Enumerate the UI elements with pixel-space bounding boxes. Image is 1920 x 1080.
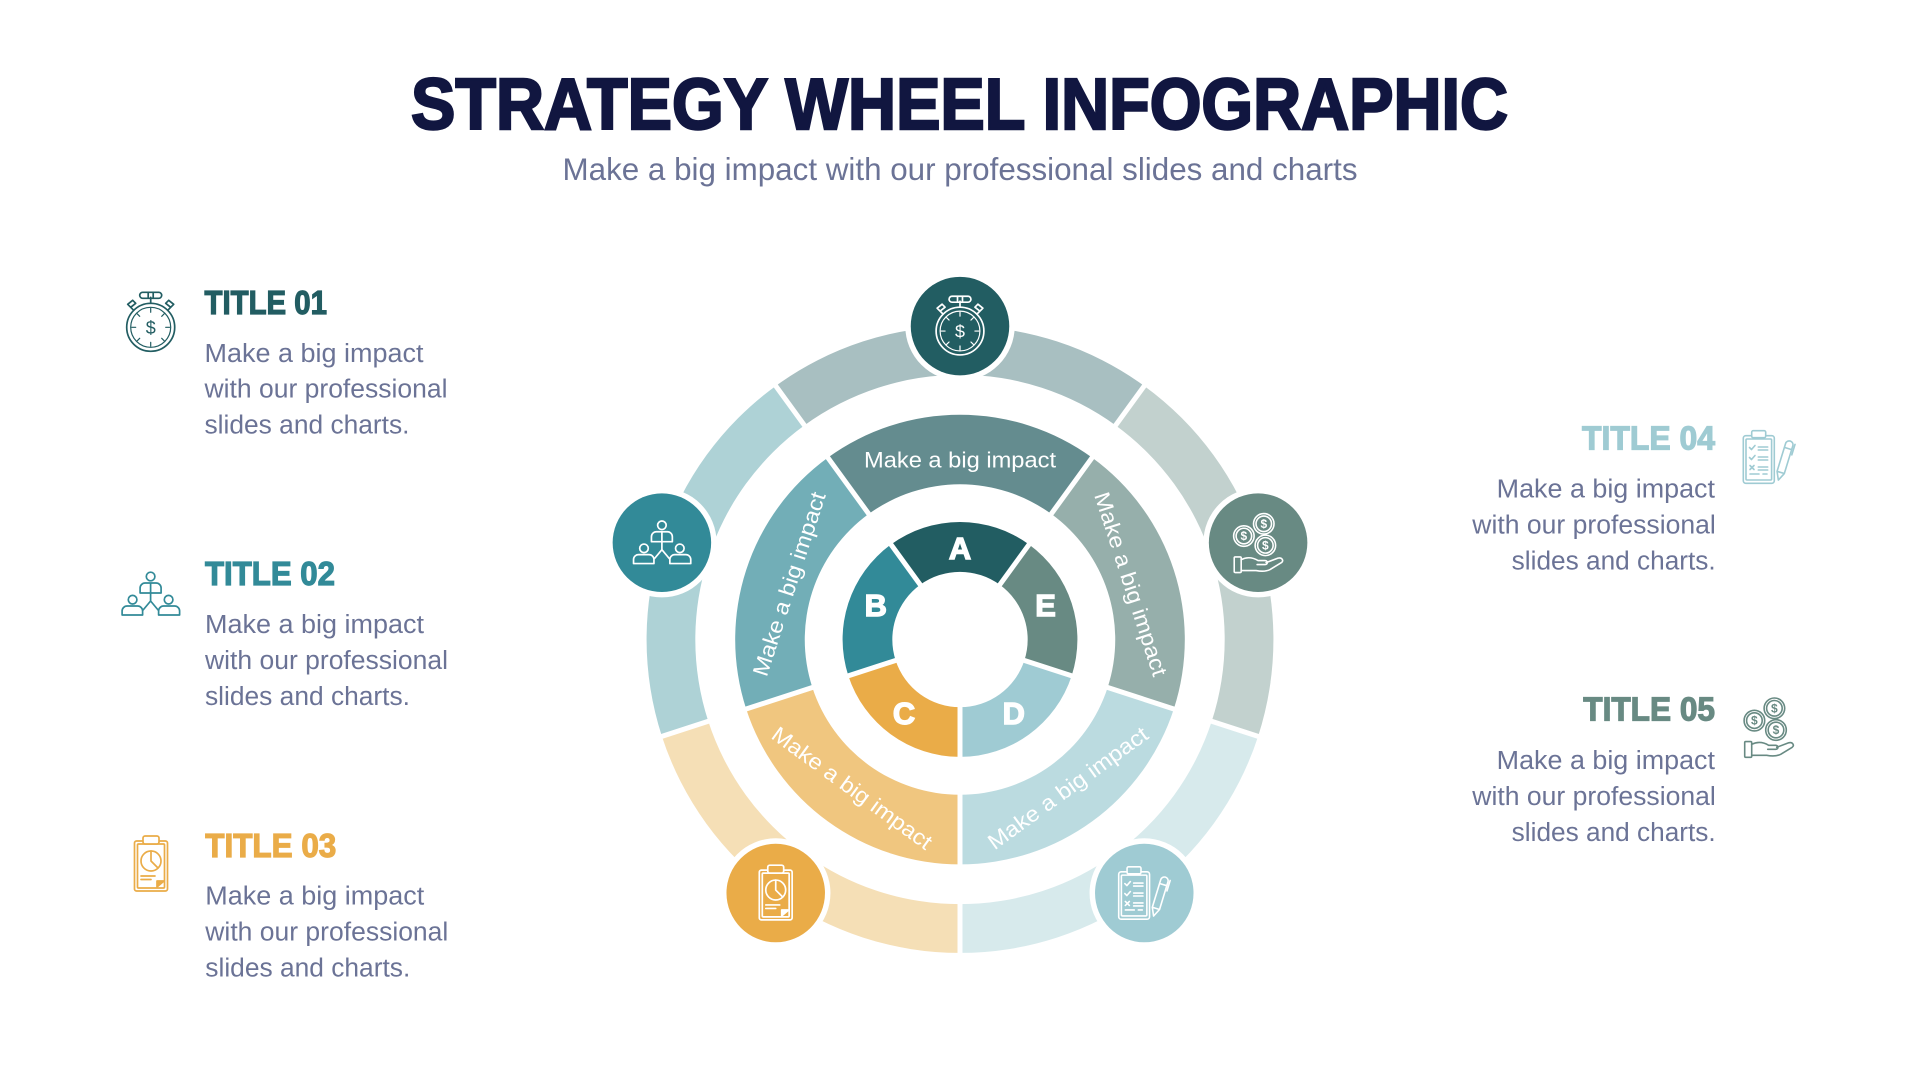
strategy wheel	[607, 271, 1313, 958]
inner ring	[843, 522, 1077, 757]
badge: coins over hand: $	[1241, 529, 1248, 543]
icon: coins over hand: $	[1773, 723, 1780, 737]
right block: title 04	[1471, 420, 1796, 576]
description: with our professional	[1471, 783, 1716, 811]
badge: clipboard with chart	[721, 838, 830, 948]
description	[204, 611, 448, 711]
description	[204, 882, 448, 982]
heading: TITLE 05	[1583, 691, 1715, 728]
inner segment: D	[960, 660, 1072, 757]
description: with our professional	[204, 647, 448, 675]
inner ring letters: E	[1035, 588, 1056, 623]
badge: people network	[607, 488, 717, 597]
middle segment: top	[828, 415, 1092, 514]
icon: coins over hand: $	[1771, 701, 1778, 715]
badge: stopwatch	[905, 271, 1015, 381]
middle ring labels: Make a big impact	[767, 721, 937, 855]
description	[1471, 747, 1716, 847]
outer segment: bottom left	[662, 721, 960, 953]
middle segment: bottom left	[746, 687, 960, 864]
inner segment: B	[843, 544, 920, 676]
middle ring labels: Make a big impact	[748, 489, 831, 679]
outer segment: right	[1116, 386, 1273, 736]
middle ring labels: Make a big impact	[1089, 489, 1172, 679]
middle ring labels: Make a big impact	[983, 721, 1153, 855]
heading: TITLE 01	[204, 284, 327, 321]
description: Make a big impact	[204, 340, 424, 368]
middle segment: right	[1051, 458, 1185, 709]
inner ring letters: C	[893, 696, 915, 731]
icon: stopwatch: $	[146, 318, 156, 338]
icon: stopwatch	[127, 292, 175, 351]
description: slides and charts.	[1512, 819, 1716, 847]
inner ring letters: A	[949, 531, 971, 566]
description: Make a big impact	[1497, 476, 1715, 504]
outer segment: bottom right	[960, 721, 1258, 953]
description	[1471, 476, 1716, 576]
badge: coins over hand: $	[1260, 517, 1267, 531]
description: with our professional	[1471, 512, 1716, 540]
heading: TITLE 02	[205, 555, 335, 592]
left block: title 03	[134, 827, 448, 982]
icon: checklist and pen	[1743, 431, 1796, 483]
description: Make a big impact	[205, 611, 424, 639]
description: slides and charts.	[205, 683, 410, 711]
inner segment: E	[1000, 544, 1077, 676]
badge: coins over hand	[1203, 488, 1313, 597]
icon: people network	[122, 572, 180, 615]
description: slides and charts.	[1512, 548, 1716, 576]
inner ring letters	[865, 531, 1056, 731]
middle ring labels	[748, 447, 1172, 855]
inner segment: A	[891, 522, 1029, 585]
heading: TITLE 03	[205, 827, 336, 864]
middle segment: left	[735, 458, 869, 709]
inner ring letters: B	[865, 588, 887, 623]
middle ring labels: Make a big impact	[864, 447, 1056, 472]
description	[203, 340, 448, 440]
heading: TITLE 04	[1582, 420, 1716, 456]
outer segment: left	[647, 386, 804, 736]
badge: stopwatch: $	[955, 322, 965, 342]
badge: checklist and pen	[1090, 838, 1199, 948]
inner ring letters: D	[1003, 696, 1025, 731]
description: with our professional	[204, 918, 448, 946]
icon: coins over hand: $	[1751, 714, 1758, 728]
title: STRATEGY WHEEL INFOGRAPHIC	[411, 65, 1508, 145]
middle ring	[735, 415, 1185, 864]
icon: coins over hand	[1744, 698, 1793, 757]
middle segment: bottom right	[960, 687, 1174, 864]
description: Make a big impact	[205, 882, 424, 910]
badge: coins over hand: $	[1262, 538, 1269, 552]
description: with our professional	[203, 376, 448, 404]
outer segment: top	[776, 326, 1144, 425]
outer ring	[647, 326, 1273, 953]
description: slides and charts.	[204, 412, 410, 440]
description: Make a big impact	[1497, 747, 1715, 775]
inner segment: C	[848, 660, 960, 757]
left block: title 01	[127, 284, 447, 440]
subtitle: Make a big impact with our professional slides and charts	[562, 151, 1358, 187]
left block: title 02	[122, 555, 448, 711]
description: slides and charts.	[205, 954, 410, 982]
right block: title 05	[1471, 691, 1793, 847]
icon: clipboard with chart	[134, 836, 168, 891]
